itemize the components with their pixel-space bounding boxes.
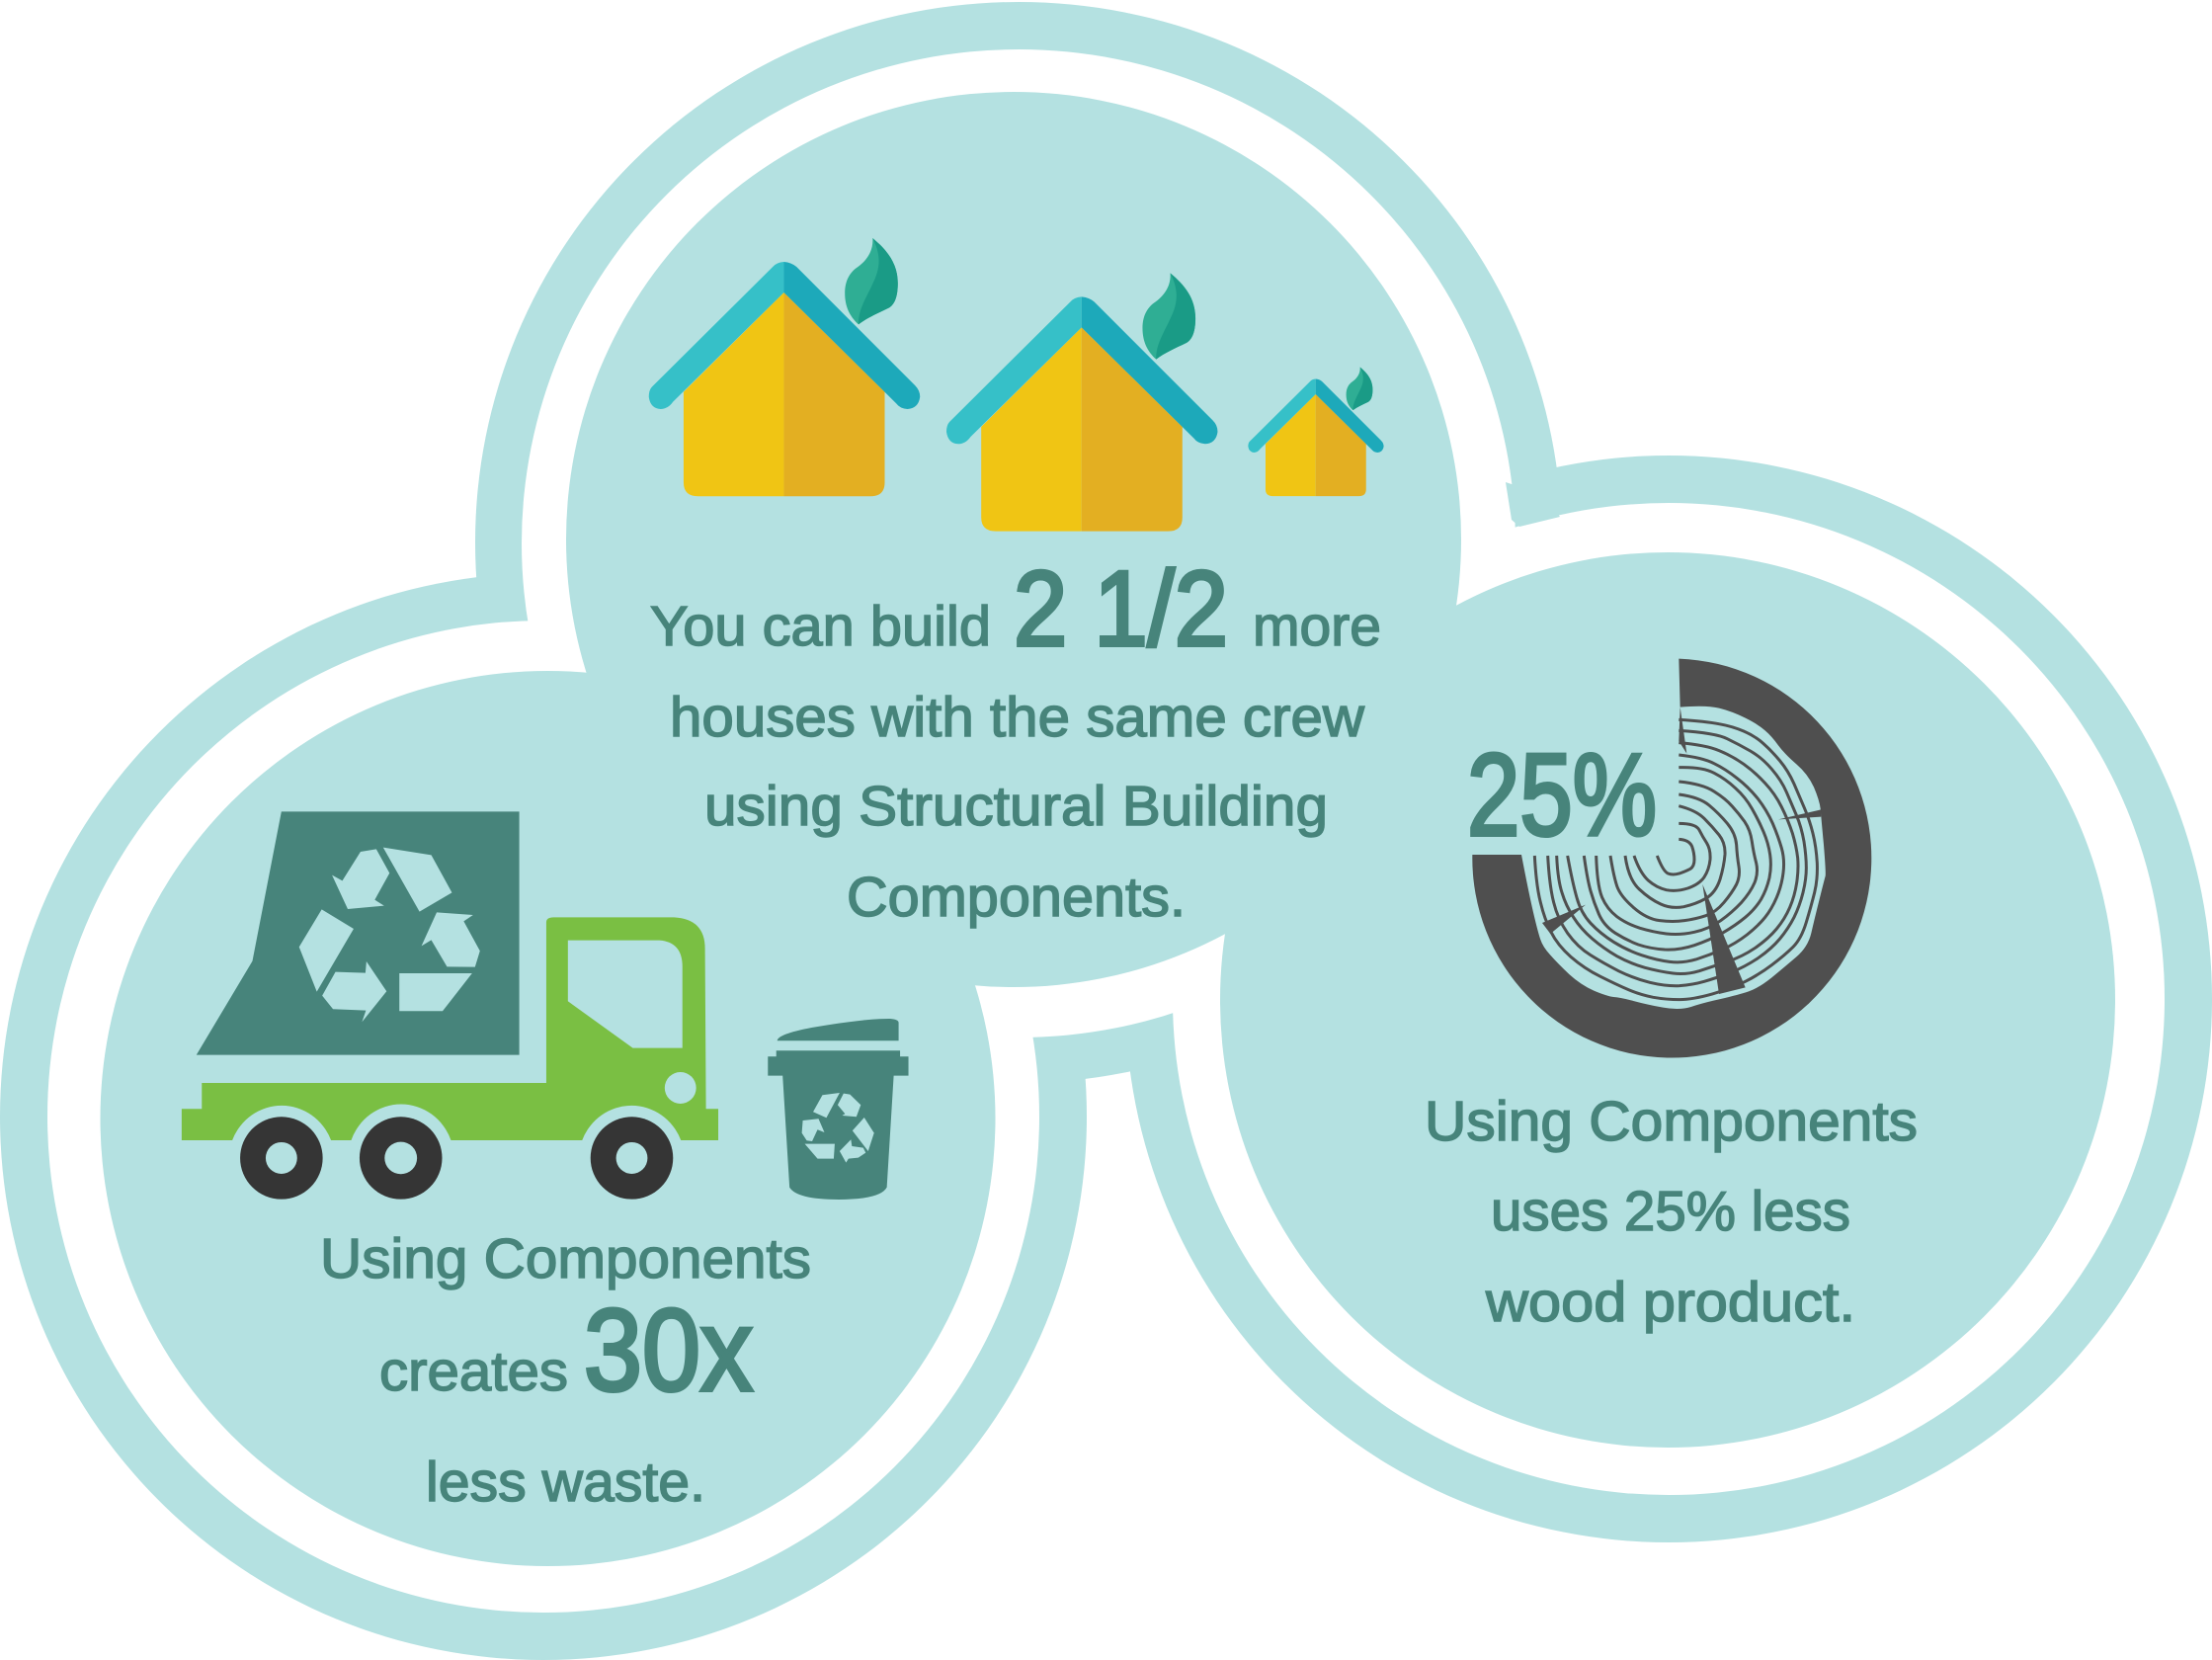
panel: houses — [649, 238, 1384, 532]
text: houses statement: more — [1253, 595, 1381, 658]
text: 25% figure: 25% — [1467, 730, 1657, 861]
truck body — [182, 917, 718, 1140]
icon: recycling bin — [768, 1019, 909, 1200]
text: houses statement: using Structural Building — [704, 775, 1328, 838]
text: wood statement: Using Components — [1425, 1090, 1918, 1153]
truck headlight — [665, 1072, 696, 1104]
text: houses statement: You can build — [650, 595, 991, 658]
icon: house with leaf, small right — [1248, 367, 1384, 496]
truck cargo box — [197, 811, 520, 1055]
tree cracks — [1542, 707, 1821, 994]
text: houses statement: Components. — [847, 866, 1186, 929]
icon: house with leaf, large left — [649, 238, 920, 496]
text: houses statement: 2 1/2 — [1014, 548, 1228, 668]
text: houses statement — [650, 548, 1381, 929]
tree bark — [1472, 659, 1871, 1058]
icon: recycling symbol on truck — [299, 848, 480, 1022]
text: waste statement: 30x — [584, 1286, 753, 1416]
icon: tree rings with quarter removed — [1472, 659, 1871, 1058]
text: waste statement: less waste. — [426, 1451, 705, 1514]
panel: recycling truck — [182, 811, 909, 1200]
text: wood statement — [1425, 1090, 1918, 1334]
growth rings — [1534, 719, 1817, 1000]
text: wood statement: wood product. — [1485, 1271, 1855, 1334]
text: wood statement: uses 25% less — [1491, 1180, 1850, 1243]
text: houses statement: houses with the same crew — [670, 686, 1365, 749]
truck window — [568, 941, 683, 1048]
truck wheels — [240, 1117, 673, 1200]
text: waste statement: creates — [379, 1340, 568, 1403]
text: waste statement: Using Components — [320, 1227, 811, 1290]
text: waste statement — [320, 1227, 811, 1514]
icon: house with leaf, large centre — [946, 273, 1217, 532]
